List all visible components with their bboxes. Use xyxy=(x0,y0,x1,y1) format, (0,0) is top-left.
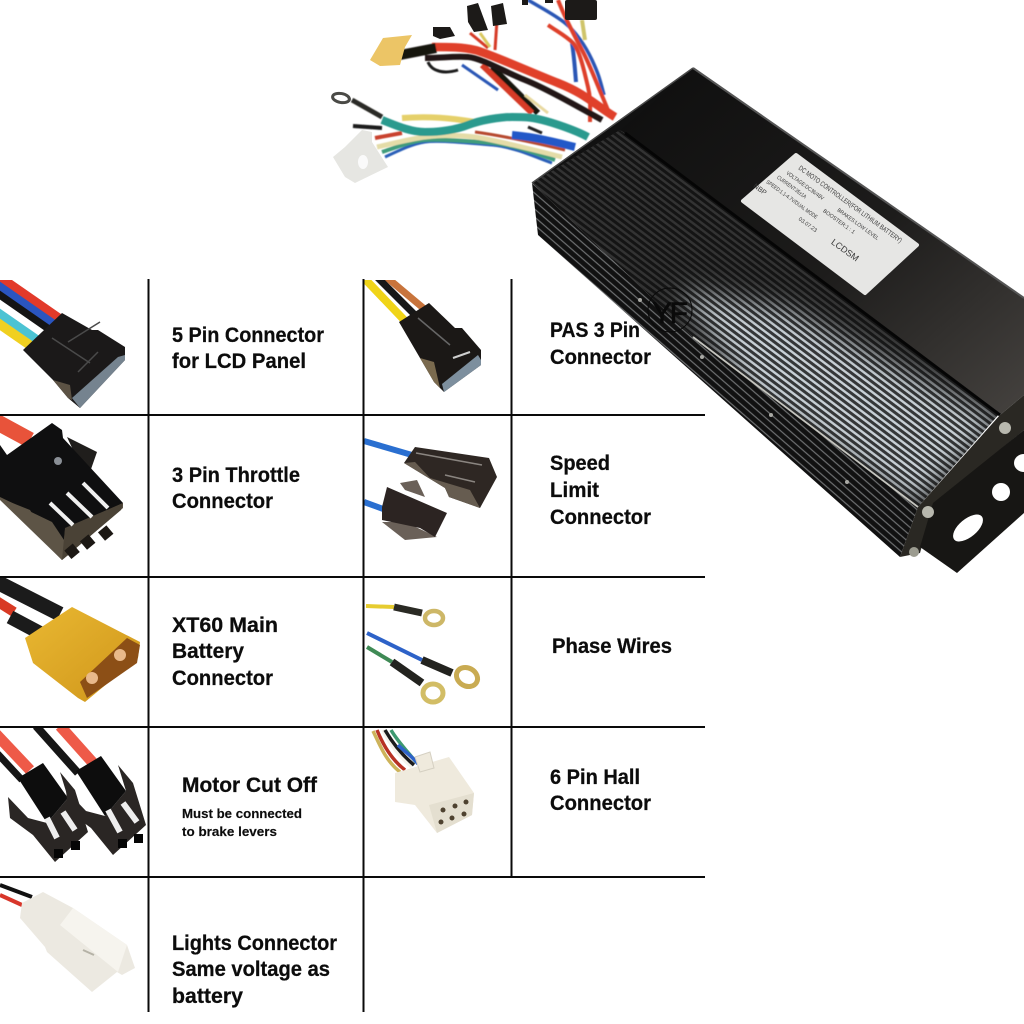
icon: XT60 battery connector xyxy=(0,581,140,702)
label: Speed Limit Connector: Connector xyxy=(550,506,651,529)
icon: speed limit connector xyxy=(364,441,497,540)
product label: BRAKES:LOW LEVEL xyxy=(836,208,880,242)
label: 3 Pin Throttle Connector: 3 Pin Throttle xyxy=(172,464,300,487)
label: Motor Cut Off, brake lever note: Must be connected xyxy=(182,806,302,821)
label: XT60 Main Battery Connector: Battery xyxy=(172,640,244,663)
label: 3 Pin Throttle Connector: Connector xyxy=(172,490,273,513)
label: XT60 Main Battery Connector: XT60 Main xyxy=(172,614,278,637)
icon: 5 pin LCD connector xyxy=(0,274,125,408)
label: Speed Limit Connector: Limit xyxy=(550,479,599,502)
icon: phase wire ring terminals xyxy=(366,606,481,702)
controller front edge xyxy=(532,68,693,183)
icon: motor cut off connectors xyxy=(0,726,146,862)
label: Motor Cut Off, brake lever note: Motor Cut Off xyxy=(182,774,318,797)
icon: PAS 3 pin connector xyxy=(364,276,481,392)
icon: ring terminal on harness xyxy=(332,92,350,104)
product label: DC MOTO CONTROLLER(FOR LITHIUM BATTERY) xyxy=(797,165,903,245)
product label: 03.07.23 xyxy=(797,217,818,234)
controller body xyxy=(532,68,1024,573)
controller ridged face xyxy=(532,130,1000,507)
label: Lights Connector, same voltage as battery: battery xyxy=(172,985,243,1008)
product label xyxy=(743,150,917,293)
product label: VOLTAGE:DC36/48V xyxy=(785,171,825,202)
label: 3 Pin Throttle Connector xyxy=(172,464,300,513)
label: 5 Pin Connector for LCD Panel: for LCD Panel xyxy=(172,350,306,373)
label: Lights Connector, same voltage as battery: Same voltage as xyxy=(172,958,330,981)
label: Phase Wires: Phase Wires xyxy=(552,635,672,658)
label: PAS 3 Pin Connector: PAS 3 Pin xyxy=(550,319,640,342)
icon: harness small black connectors xyxy=(433,0,597,39)
side rivets xyxy=(638,298,849,484)
watermark: YF xyxy=(648,288,692,332)
icon: XT60 plug on harness xyxy=(370,35,412,66)
label: PAS 3 Pin Connector xyxy=(550,319,651,369)
table grid xyxy=(0,279,705,1012)
watermark: YF: YF xyxy=(652,297,688,330)
product label: SPEED:1.1-4.7V/DUAL MODE xyxy=(765,179,819,221)
icon: white hall plug on harness xyxy=(333,130,388,183)
label: Lights Connector, same voltage as battery: Lights Connector xyxy=(172,932,337,955)
label: 6 Pin Hall Connector: 6 Pin Hall xyxy=(550,766,640,789)
label: Lights Connector, same voltage as battery xyxy=(172,932,337,1008)
icon: 3 pin throttle connector xyxy=(0,421,123,560)
product label: NBP xyxy=(752,183,768,197)
label: 6 Pin Hall Connector xyxy=(550,766,651,815)
label: Motor Cut Off, brake lever note: to brake levers xyxy=(182,824,277,839)
product label: LCDSM xyxy=(829,237,861,263)
icon: lights connector xyxy=(0,885,135,992)
label: XT60 Main Battery Connector xyxy=(172,614,278,690)
label: PAS 3 Pin Connector: Connector xyxy=(550,346,651,369)
label: 5 Pin Connector for LCD Panel xyxy=(172,324,324,373)
icon: 6 pin hall connector xyxy=(373,730,474,833)
product label: BOOSTER:1 : 1 xyxy=(821,208,856,236)
product label: CURRENT:35±1A xyxy=(775,175,807,200)
label: XT60 Main Battery Connector: Connector xyxy=(172,667,273,690)
label: Speed Limit Connector xyxy=(550,452,651,529)
controller top face xyxy=(620,68,1024,415)
controller side face xyxy=(532,183,918,557)
label: 6 Pin Hall Connector: Connector xyxy=(550,792,651,815)
end plate and mounting bracket xyxy=(900,395,1024,573)
label: Speed Limit Connector: Speed xyxy=(550,452,610,475)
wiring harness xyxy=(352,0,615,163)
label: 5 Pin Connector for LCD Panel: 5 Pin Connector xyxy=(172,324,324,347)
label: Motor Cut Off, brake lever note xyxy=(182,774,318,839)
